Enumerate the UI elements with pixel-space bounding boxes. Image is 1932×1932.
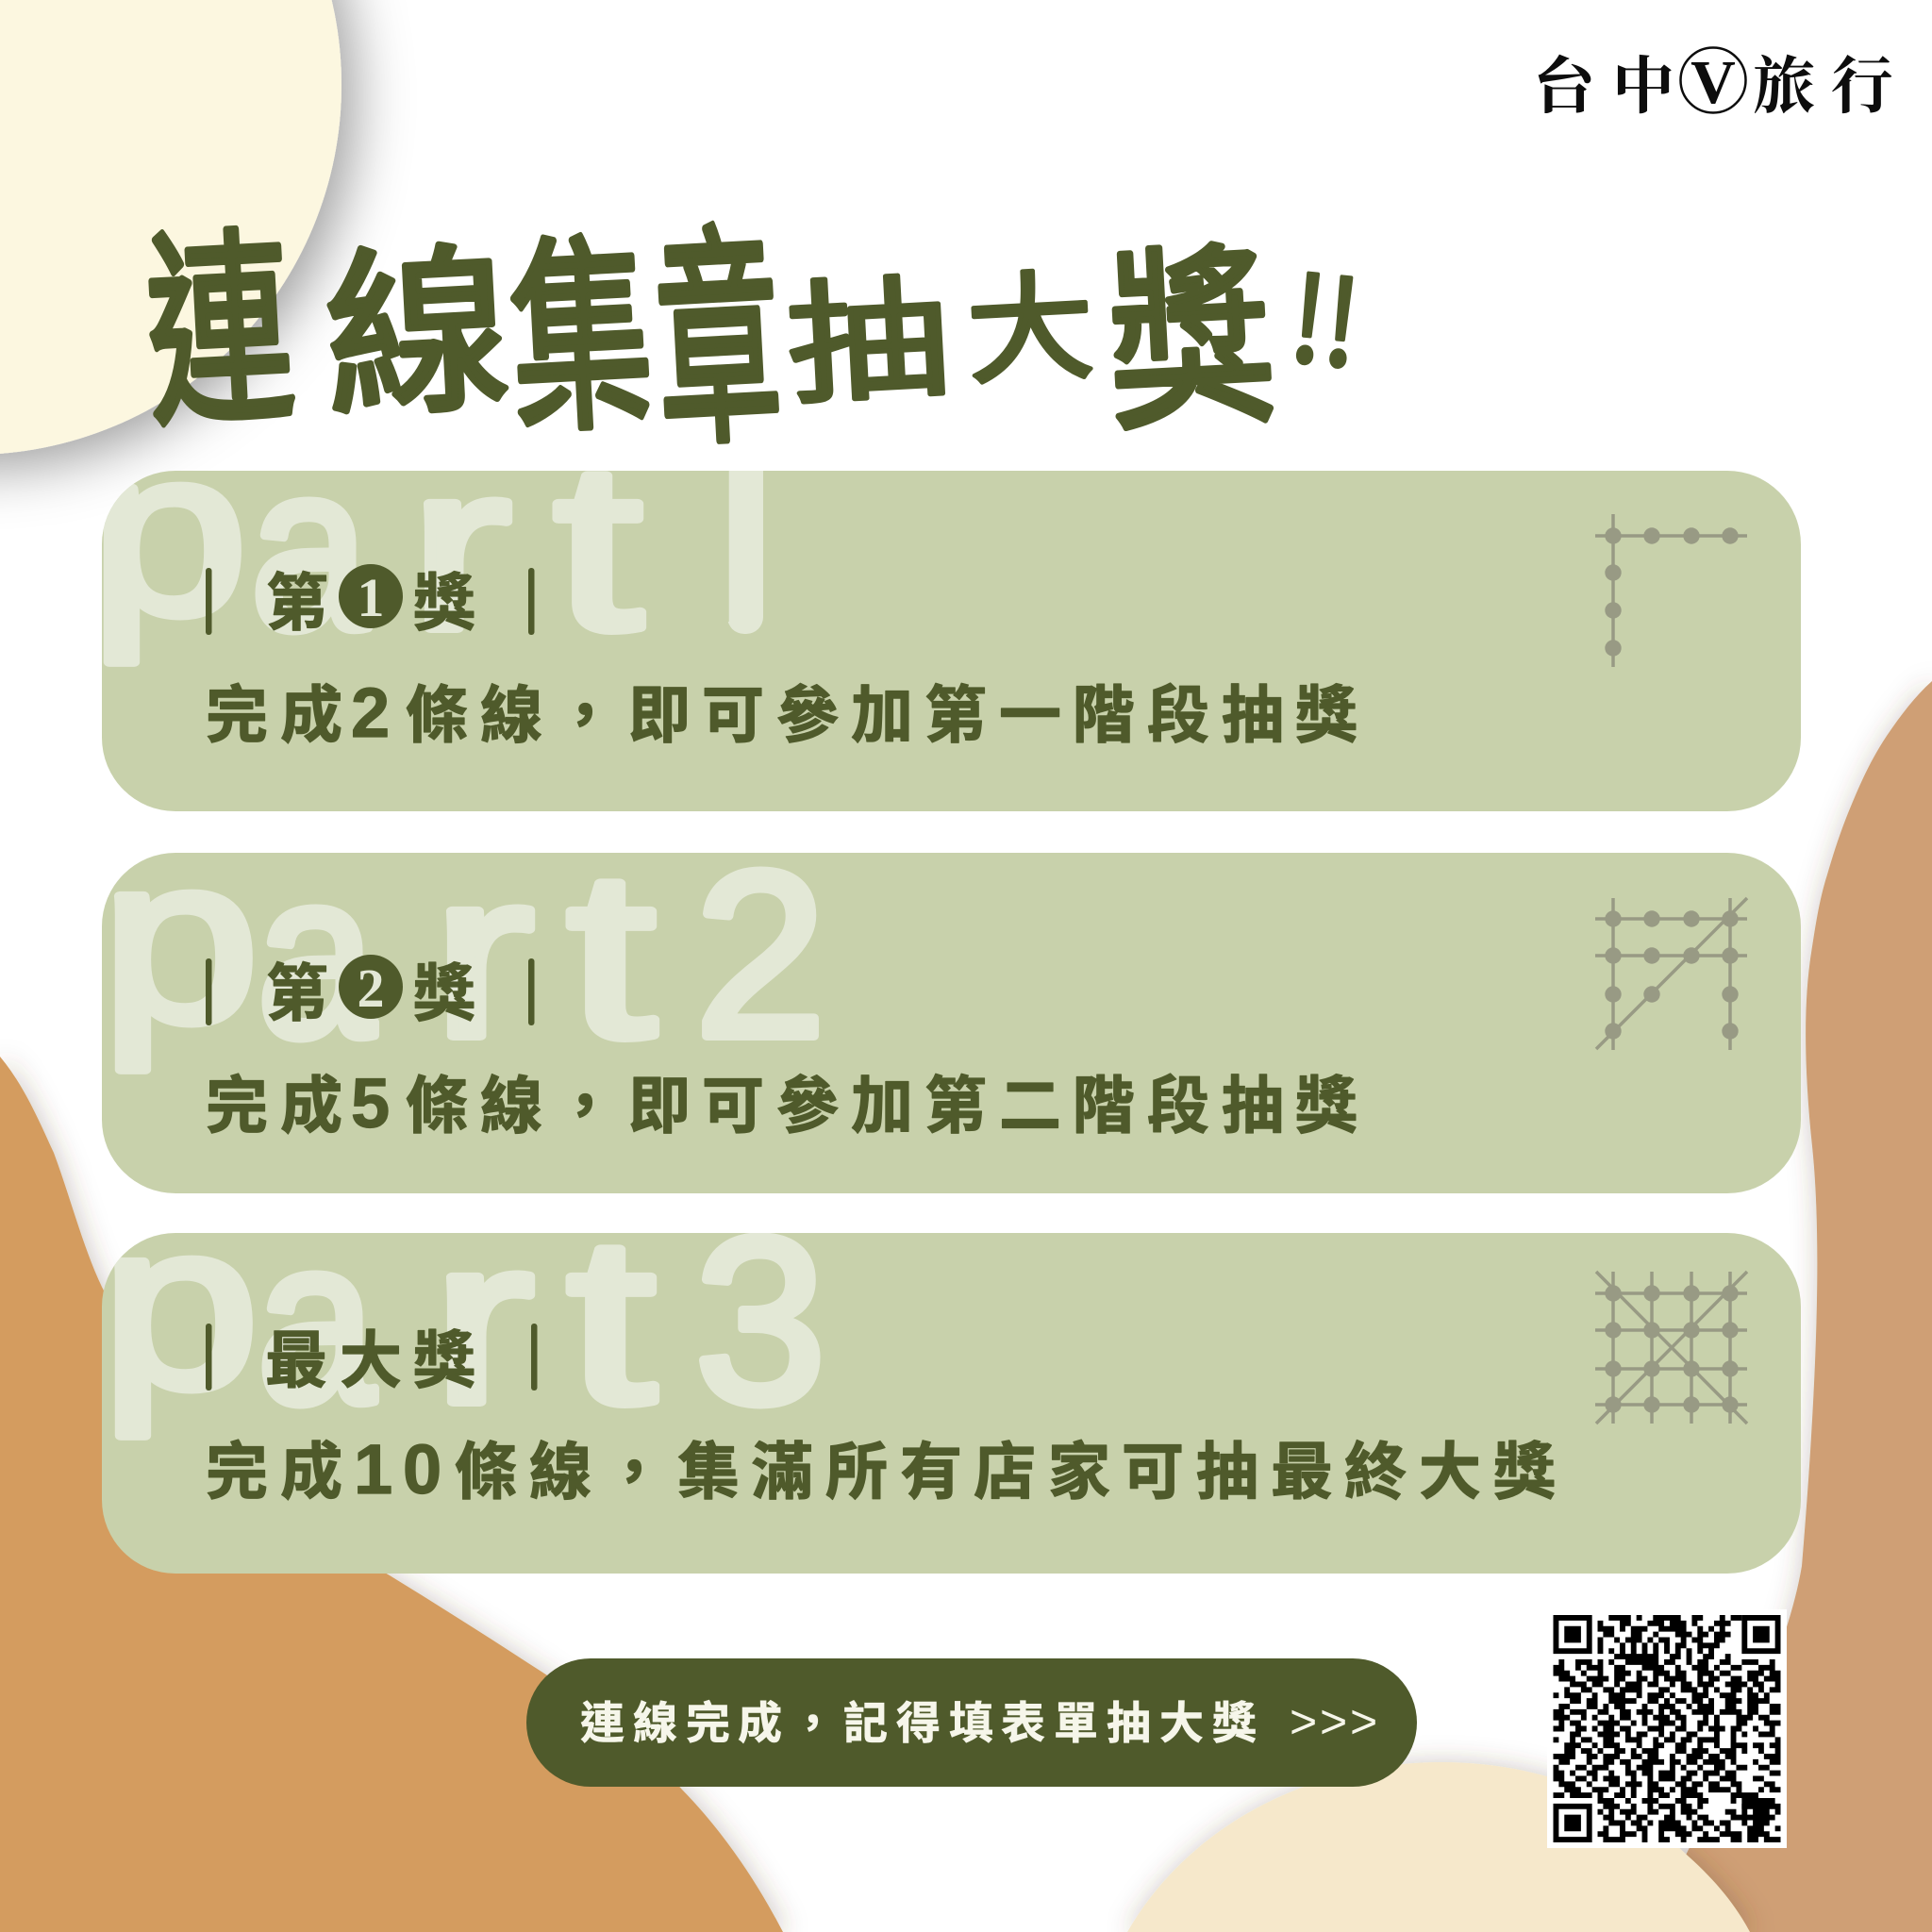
watermark: part1: 1 <box>675 259 815 772</box>
heading: first prize: 第 <box>266 568 328 638</box>
background blob: top-left cream circle <box>0 0 341 455</box>
watermark: part3: a <box>257 1190 375 1453</box>
bar right <box>531 1324 538 1391</box>
brand logo: 台 <box>1533 36 1597 125</box>
watermark: part3: t <box>567 1189 657 1452</box>
finder patterns <box>1553 1615 1781 1842</box>
title: !! <box>1284 224 1369 401</box>
brand logo: V <box>1690 48 1736 117</box>
text: condition: 條線，集滿所有店家可抽最終大獎 <box>455 1437 1556 1507</box>
title <box>139 153 1369 491</box>
heading: first prize <box>266 564 475 638</box>
watermark: part2 <box>114 866 819 1074</box>
heading: first prize: 獎 <box>413 568 475 638</box>
brand logo <box>1533 36 1893 125</box>
bar left <box>206 1324 211 1391</box>
watermark: part2: 2 <box>694 823 826 1086</box>
button: fill in the form: >>> <box>1290 1695 1377 1748</box>
background blob: bottom beige <box>1127 1762 1750 1932</box>
panel: grand prize <box>102 1233 1801 1574</box>
button: fill in the form <box>526 1658 1417 1787</box>
watermark: part2: a <box>257 824 375 1087</box>
watermark: part1: a <box>250 416 369 679</box>
button: fill in the form: 連線完成，記得填表單抽大獎 <box>580 1698 1257 1748</box>
watermark: part2: r <box>432 824 534 1086</box>
bar right <box>528 958 534 1025</box>
heading: second prize <box>266 955 475 1028</box>
heading: second prize: 第 <box>266 958 328 1028</box>
brand logo: 中 <box>1612 36 1674 125</box>
watermark: part2: t <box>567 823 657 1086</box>
title: 獎 <box>1100 180 1280 468</box>
icon: bingo two lines <box>1595 514 1747 667</box>
bar left <box>206 958 211 1025</box>
watermark: part2: p <box>102 808 258 1073</box>
watermark: part1: r <box>409 416 511 678</box>
watermark: part3 <box>114 1233 821 1441</box>
watermark: part3: r <box>432 1190 534 1452</box>
title: 連 <box>139 159 300 468</box>
text: condition: 完成 <box>206 680 342 750</box>
panel: first prize <box>102 471 1801 811</box>
watermark: part1: t <box>554 415 643 678</box>
text: condition: 完成 <box>206 1437 342 1507</box>
watermark: part1 <box>104 471 763 667</box>
text: condition: 5 <box>351 1064 390 1142</box>
brand logo: 旅 <box>1753 36 1815 125</box>
text: condition: 條線，即可參加第一階段抽獎 <box>406 680 1357 750</box>
watermark: part3: 3 <box>694 1189 826 1452</box>
watermark: part3: p <box>102 1174 258 1439</box>
QR code <box>1547 1609 1787 1848</box>
text: condition: 2 <box>351 674 390 752</box>
title: 抽 <box>781 231 954 431</box>
heading: first prize: 1 <box>357 567 385 628</box>
text: condition: 10 <box>354 1430 441 1508</box>
title: 線 <box>318 185 515 453</box>
text: condition: 條線，即可參加第二階段抽獎 <box>406 1071 1357 1141</box>
heading: second prize: 2 <box>357 958 385 1019</box>
icon: bingo five lines <box>1595 898 1747 1050</box>
bar right <box>528 568 534 635</box>
bar left <box>206 568 211 635</box>
heading: second prize: 獎 <box>413 958 475 1028</box>
panel: second prize <box>102 853 1801 1193</box>
title: 章 <box>647 153 788 491</box>
text: condition: 完成 <box>206 1071 342 1141</box>
heading: grand prize: 最大獎 <box>265 1325 475 1395</box>
background blob: left orange <box>0 1057 783 1932</box>
brand logo: 行 <box>1831 36 1893 125</box>
watermark: part1: p <box>91 400 247 665</box>
title: 大 <box>961 230 1098 408</box>
title: 集 <box>502 168 659 475</box>
background blob: right tan <box>1651 681 1932 1932</box>
icon: bingo ten lines <box>1595 1272 1747 1424</box>
